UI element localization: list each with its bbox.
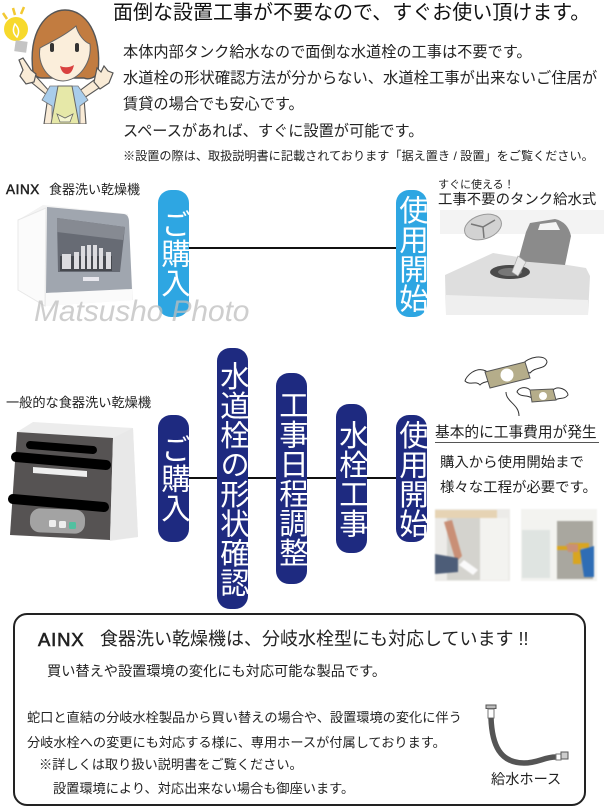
label: general dishwasher: 一般的な食器洗い乾燥機 [6, 395, 151, 410]
label: AINX dishwasher [6, 182, 140, 197]
image: general dishwasher [8, 422, 138, 541]
caption: tank water supply: 工事不要のタンク給水式 [438, 192, 596, 208]
text block: hose note: ※詳しくは取り扱い説明書をご覧ください。 [39, 757, 303, 772]
caption: tank water supply: すぐに使える！ [438, 179, 515, 191]
text block: intro: 本体内部タンク給水なので面倒な水道栓の工事は不要です。 [123, 44, 532, 61]
text block: intro: 賃貸の場合でも安心です。 [123, 96, 304, 113]
photo: drilling cabinet [521, 509, 597, 581]
step: start of use: 使用開始 [395, 420, 428, 538]
text block: intro: スペースがあれば、すぐに設置が可能です。 [123, 123, 423, 140]
icon: flying money [464, 356, 568, 416]
text block: process note [440, 454, 597, 496]
panel: branch faucet support [13, 613, 586, 806]
step: purchase: ご購入 [157, 209, 190, 298]
text block: process note: 様々な工程が必要です。 [440, 480, 597, 496]
image: water tank pouring [440, 210, 604, 315]
step: start of use: 使用開始 [395, 194, 428, 312]
flow line: AINX [185, 247, 400, 249]
label: AINX dishwasher: 食器洗い乾燥機 [49, 182, 140, 197]
step: purchase [158, 190, 189, 317]
icon: water supply hose [486, 704, 568, 766]
text block: intro [123, 44, 597, 163]
heading: branch faucet: 食器洗い乾燥機は、分岐水栓型にも対応しています !! [100, 629, 528, 649]
step: purchase: ご購入 [157, 434, 190, 523]
text: replacement note: 買い替えや設置環境の変化にも対応可能な製品です。 [47, 664, 386, 680]
step: schedule construction: 工事日程調整 [275, 390, 308, 567]
photo: plumbing under sink [434, 508, 510, 582]
label: AINX dishwasher: AINX [6, 182, 40, 197]
image: AINX dishwasher [18, 205, 133, 307]
title: 面倒な設置工事が不要なので、すぐお使い頂けます。 [113, 2, 590, 24]
heading: construction cost: 基本的に工事費用が発生 [435, 425, 597, 441]
text block: process note: 購入から使用開始まで [440, 455, 584, 471]
caption: tank water supply [438, 178, 596, 208]
heading: branch faucet: AINX [38, 629, 84, 650]
step: faucet work: 水栓工事 [335, 420, 368, 538]
text block: hose note [27, 710, 462, 796]
flow line: general [185, 477, 400, 479]
label: water hose: 給水ホース [491, 772, 561, 788]
text block: hose note: 分岐水栓への変更にも対応する様に、専用ホースが付属しております。 [27, 735, 446, 750]
watermark: Matsusho Photo [34, 295, 249, 328]
text block: intro: 水道栓の形状確認方法が分からない、水道栓工事が出来ないご住居が [123, 70, 597, 87]
icon: woman with light bulb [2, 6, 114, 124]
text block: hose note: 設置環境により、対応出来ない場合も御座います。 [53, 781, 354, 796]
step: check faucet shape: 水道栓の形状確認 [216, 360, 249, 596]
text block: intro: ※設置の際は、取扱説明書に記載されております「据え置き / 設置」をご覧ください。 [123, 149, 594, 163]
text block: hose note: 蛇口と直結の分岐水栓製品から買い替えの場合や、設置環境の変化に伴う [27, 710, 462, 725]
step: purchase [158, 415, 189, 542]
